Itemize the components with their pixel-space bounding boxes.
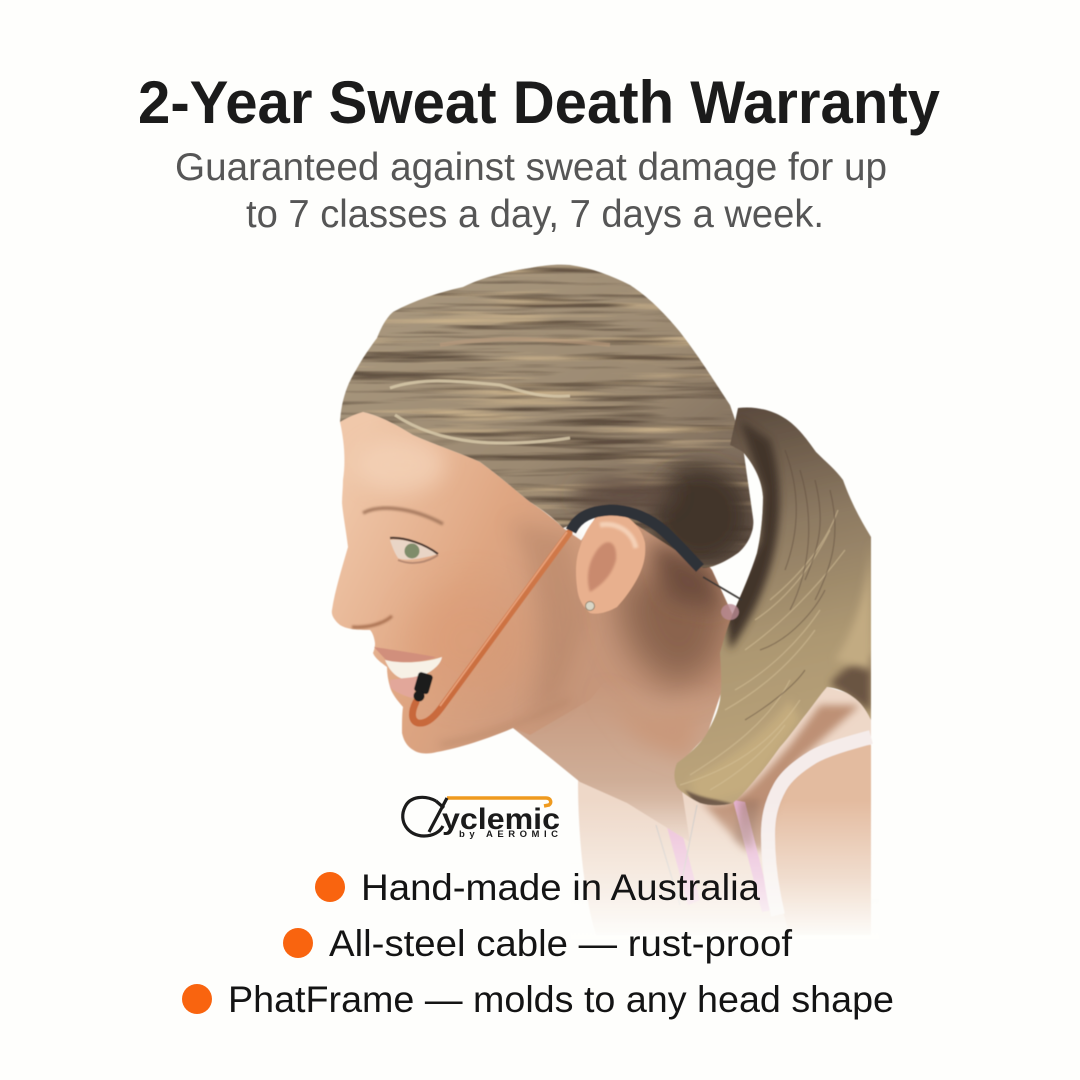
earring [586, 602, 594, 610]
feature: hand-made: Hand-made in Australia [361, 867, 760, 908]
subtitle [175, 146, 887, 236]
logo C swoosh [403, 797, 447, 836]
photo: woman wearing the headset microphone [331, 264, 872, 929]
feature: PhatFrame: PhatFrame — molds to any head shape [228, 979, 894, 1020]
photo fade [570, 800, 880, 940]
logo tagline: by AEROMIC [459, 829, 558, 840]
feature list [182, 867, 894, 1020]
headset microphone boom [412, 510, 742, 723]
subtitle: to 7 classes a day, 7 days a week. [246, 193, 824, 236]
ear [576, 514, 645, 614]
mouth [374, 647, 442, 698]
logo orange bar [447, 798, 551, 806]
tank top strap [768, 737, 871, 915]
eyebrow [363, 508, 443, 524]
eye [390, 538, 438, 563]
title: 2-Year Sweat Death Warranty [138, 69, 941, 136]
logo: Cyclemic by Aeromic [403, 797, 560, 840]
pink top at neck [721, 604, 739, 620]
logo wordmark: yclemic [442, 803, 560, 836]
ponytail [674, 407, 871, 810]
hair [339, 264, 754, 568]
necklace [656, 805, 697, 905]
shoulder and chest [578, 687, 871, 935]
microphone tip [414, 671, 433, 702]
subtitle: Guaranteed against sweat damage for up [175, 146, 887, 189]
feature: all-steel cable: All-steel cable — rust-proof [329, 923, 793, 964]
face and neck skin [332, 412, 735, 842]
nose shadow [352, 616, 392, 627]
